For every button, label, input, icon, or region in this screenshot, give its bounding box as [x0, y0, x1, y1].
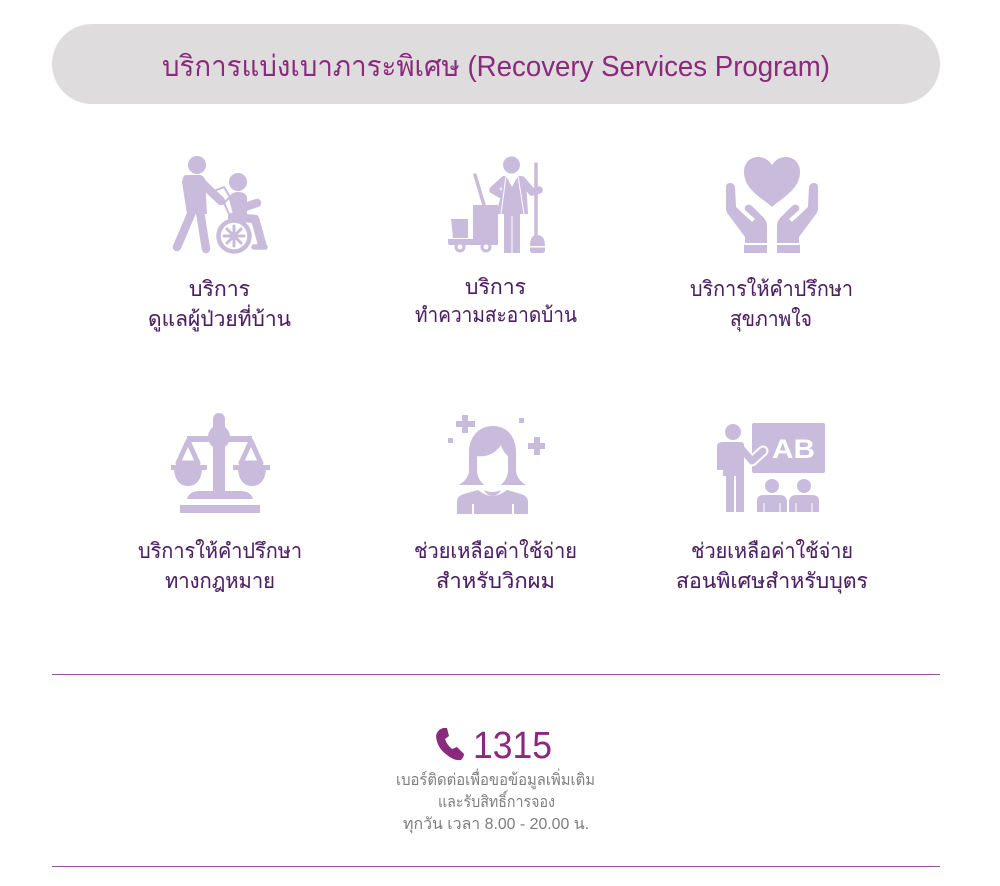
icon: wheelchair carer [177, 156, 265, 252]
contact block [396, 725, 595, 834]
panel: legal counselling [138, 413, 302, 593]
panel: house cleaning [415, 156, 577, 327]
label [138, 539, 302, 593]
label: ทางกฎหมาย [165, 570, 275, 593]
label: บริการให้คำปรึกษา [138, 539, 302, 563]
label: สำหรับวิกผม [436, 570, 555, 593]
icon: teacher and students: AB [772, 434, 815, 464]
header banner [52, 24, 940, 104]
label [690, 277, 853, 332]
icon: hands holding heart [726, 157, 818, 253]
phone number: 1315 [473, 725, 552, 767]
icon: phone [436, 728, 464, 760]
label: ช่วยเหลือค่าใช้จ่าย [691, 539, 853, 563]
contact details: และรับสิทธิ์การจอง [438, 790, 555, 811]
contact details [396, 768, 595, 834]
label: สอนพิเศษสำหรับบุตร [676, 570, 868, 594]
icon: scales of justice [171, 413, 270, 513]
label: ทำความสะอาดบ้าน [415, 304, 577, 327]
icon: woman with sparkles [448, 415, 545, 514]
title: บริการแบ่งเบาภาระพิเศษ (Recovery Services Program) [162, 51, 830, 83]
label: บริการให้คำปรึกษา [690, 277, 853, 301]
panel: hair loss expenses [414, 415, 577, 593]
label [414, 539, 577, 593]
label: บริการ [189, 278, 250, 301]
panel: children's tutoring expenses [676, 423, 868, 594]
label [415, 276, 577, 327]
label: สุขภาพใจ [730, 307, 812, 332]
panel: mental health counselling [690, 157, 853, 332]
label: ช่วยเหลือค่าใช้จ่าย [414, 539, 577, 563]
label: ดูแลผู้ป่วยที่บ้าน [148, 304, 291, 332]
panel: home patient care [148, 156, 291, 332]
contact details: เบอร์ติดต่อเพื่อขอข้อมูลเพิ่มเติม [396, 768, 595, 790]
icon: cleaner with cart [448, 156, 545, 253]
label [676, 539, 868, 594]
label: บริการ [465, 276, 526, 299]
label [148, 278, 291, 332]
contact details: ทุกวัน เวลา 8.00 - 20.00 น. [403, 816, 589, 834]
icon: teacher and students [717, 423, 825, 512]
